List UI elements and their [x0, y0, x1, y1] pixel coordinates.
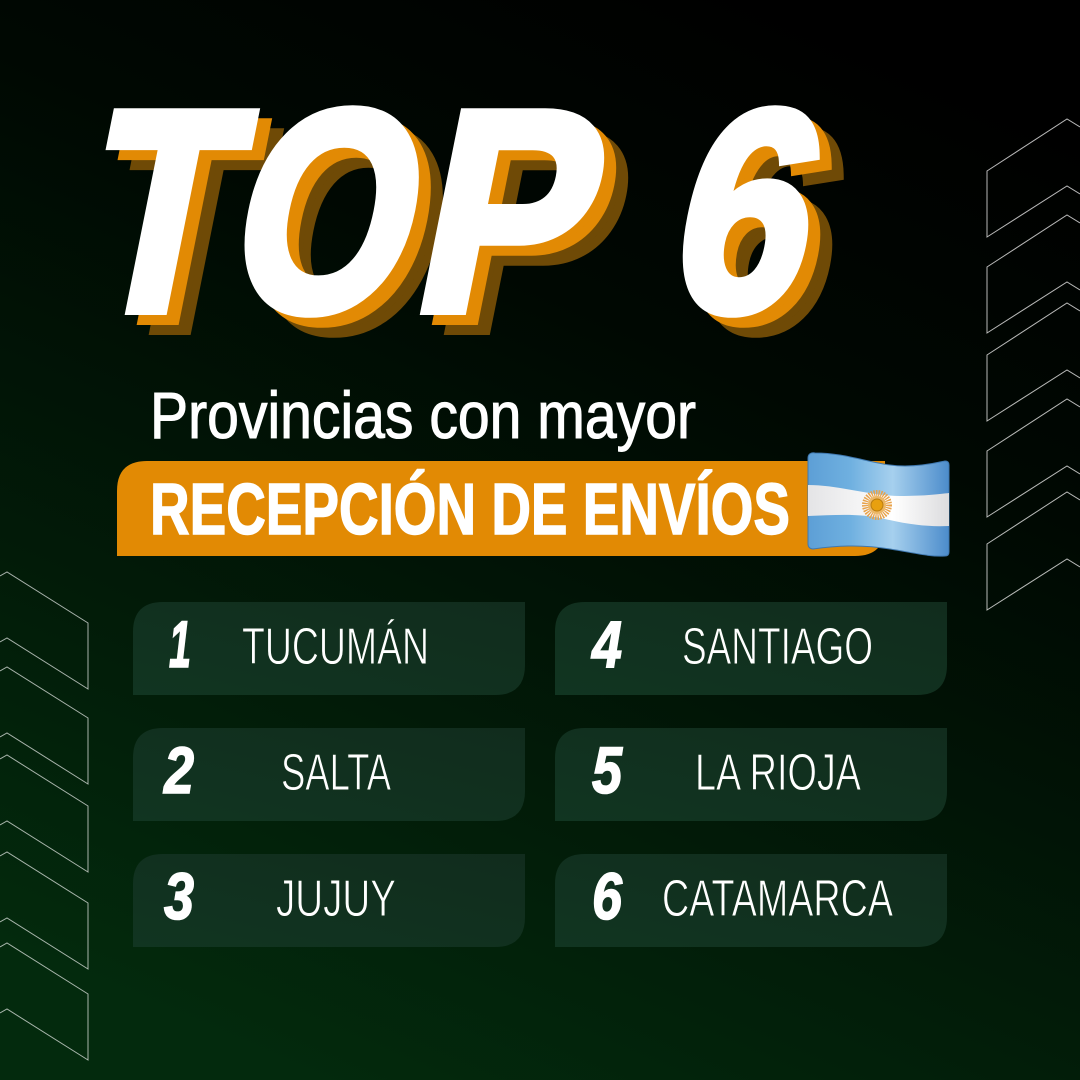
title: TOP 6: 6: [652, 51, 849, 371]
panel: rank 5: 5: [592, 733, 623, 807]
title: TOP 6: 6: [676, 71, 873, 391]
panel: rank 6: 6: [592, 859, 623, 933]
panel: rank 5: LA RIOJA: [695, 744, 861, 802]
title: TOP 6: O: [223, 61, 465, 381]
panel: rank 5: [555, 728, 947, 821]
decorative chevrons right: [987, 119, 1080, 610]
panel: rank 2: [133, 728, 525, 821]
title: TOP 6: 6: [664, 61, 861, 381]
decorative chevrons left: [0, 572, 88, 1060]
title: TOP 6: [63, 51, 873, 392]
orange banner: [117, 461, 885, 556]
panel: rank 2: SALTA: [281, 744, 391, 802]
icon: Argentine flag: [808, 453, 949, 556]
panel: rank 6: [555, 854, 947, 947]
panel: rank 1: [133, 602, 525, 695]
subtitle: Provincias con mayor: [150, 378, 696, 452]
title: TOP 6: T: [87, 72, 294, 392]
banner heading: RECEPCIÓN DE ENVÍOS: [150, 469, 790, 550]
panel: rank 1: TUCUMÁN: [242, 618, 429, 676]
panel: rank 3: 3: [164, 859, 194, 933]
title: TOP 6: O: [235, 71, 477, 391]
title: TOP 6: O: [211, 51, 453, 371]
panel: rank 1: 1: [169, 607, 191, 681]
panel: rank 4: SANTIAGO: [682, 618, 873, 676]
title: TOP 6: P: [396, 52, 631, 371]
panel: rank 4: 4: [590, 607, 622, 681]
panel: rank 6: CATAMARCA: [662, 870, 893, 928]
panel: rank 2: 2: [162, 733, 194, 807]
title: TOP 6: T: [75, 62, 282, 382]
panel: rank 3: JUJUY: [276, 870, 396, 928]
title: TOP 6: P: [408, 62, 643, 381]
panel: rank 3: [133, 854, 525, 947]
title: TOP 6: T: [63, 52, 270, 372]
panel: rank 4: [555, 602, 947, 695]
title: TOP 6: P: [420, 72, 655, 391]
